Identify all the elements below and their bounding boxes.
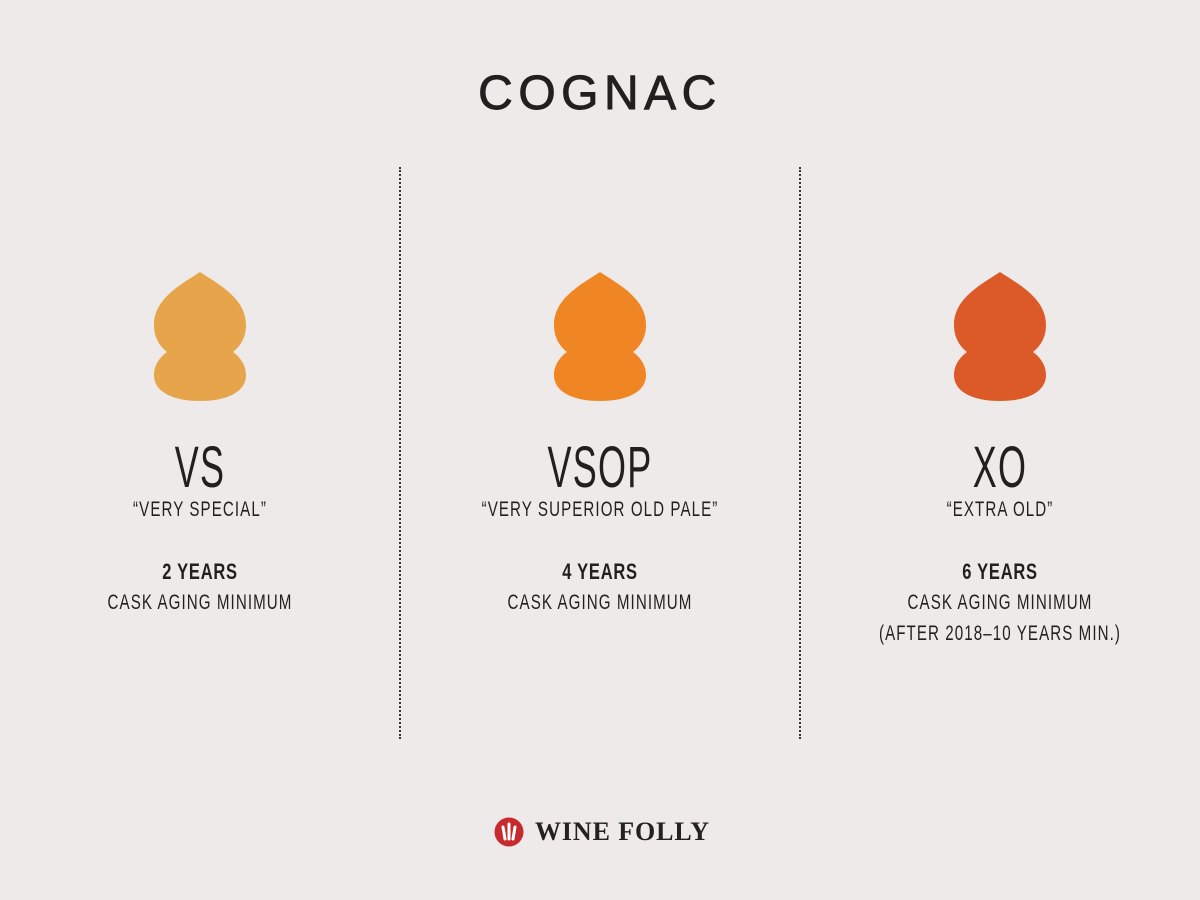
divider right [799, 167, 801, 739]
years: 2 YEARS [162, 559, 238, 584]
cask [879, 591, 1121, 645]
icon: XO glass [954, 272, 1046, 401]
years: 6 YEARS [962, 559, 1038, 584]
cask: CASK AGING MINIMUM [908, 591, 1092, 614]
cask: (AFTER 2018–10 YEARS MIN.) [879, 622, 1121, 645]
icon: VSOP glass [554, 272, 646, 401]
heading VS: VS [175, 435, 225, 500]
divider left [399, 167, 401, 739]
panel: XO [879, 272, 1121, 645]
icon: VS glass [154, 272, 246, 401]
subtitle: “EXTRA OLD” [947, 498, 1053, 521]
title: COGNAC [478, 67, 722, 120]
logo text: WINE FOLLY [535, 817, 710, 846]
subtitle: “VERY SUPERIOR OLD PALE” [482, 498, 718, 521]
logo: Wine Folly [494, 817, 710, 846]
years: 4 YEARS [562, 559, 638, 584]
panel: VS [108, 272, 292, 614]
cask: CASK AGING MINIMUM [508, 591, 692, 614]
heading VSOP: VSOP [548, 435, 652, 500]
subtitle: “VERY SPECIAL” [133, 498, 267, 521]
panel: VSOP [482, 272, 718, 614]
icon: logo circle [494, 818, 524, 846]
heading XO: XO [973, 435, 1027, 500]
cask: CASK AGING MINIMUM [108, 591, 292, 614]
